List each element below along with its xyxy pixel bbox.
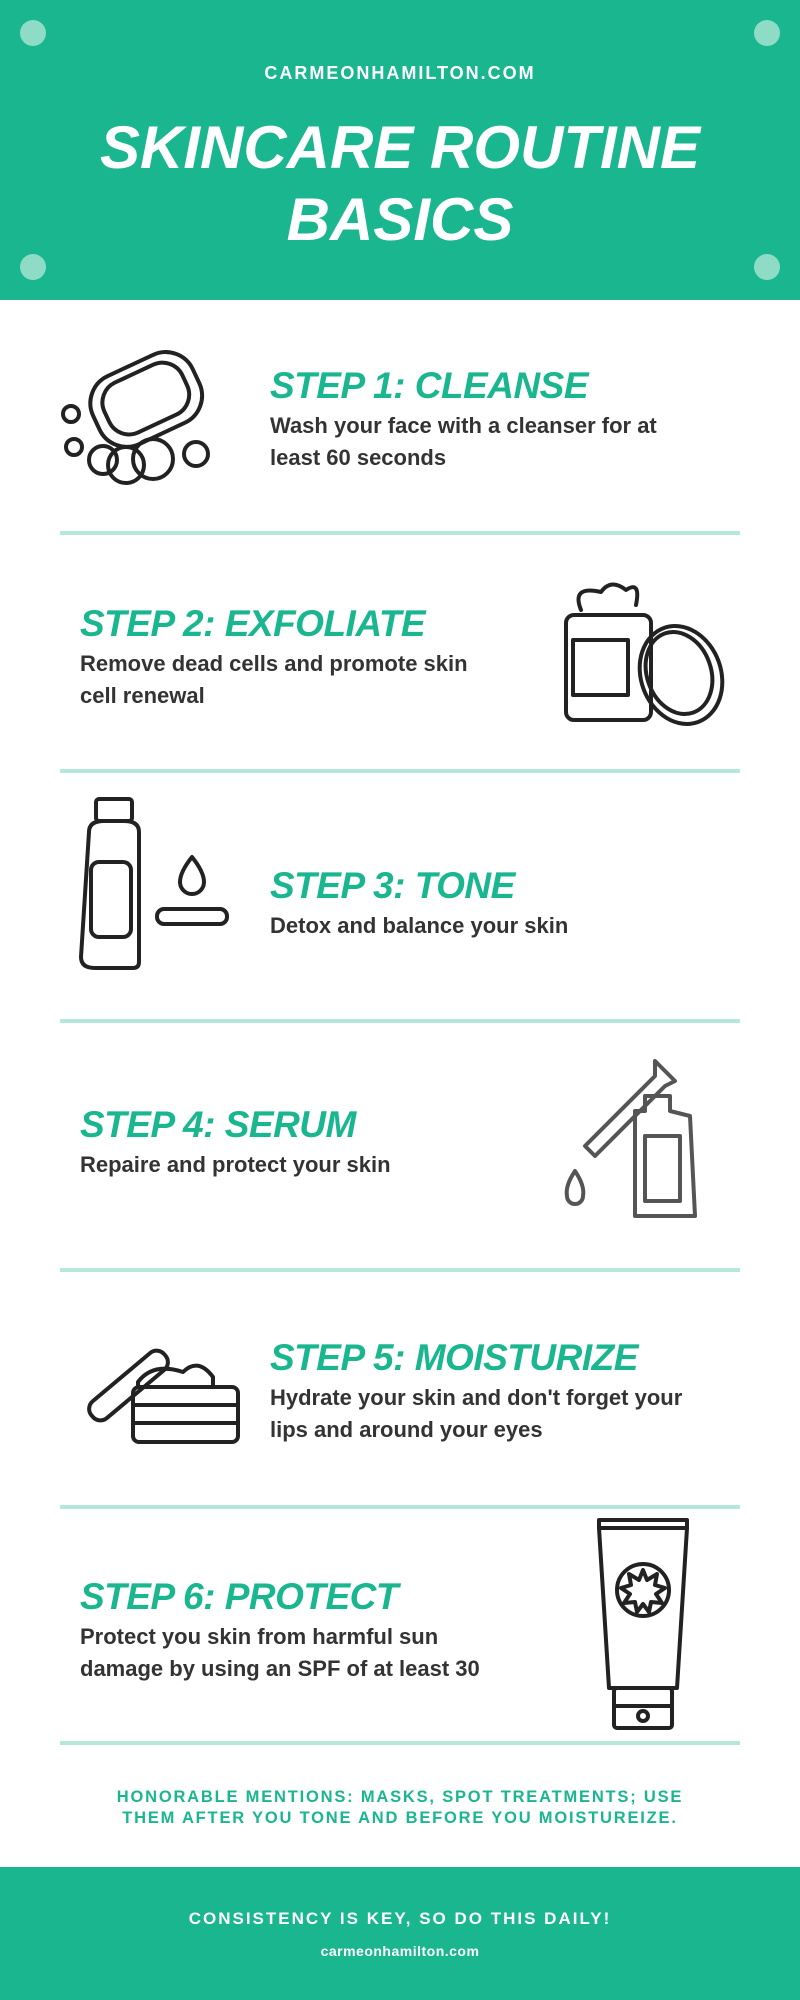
step 2 text (80, 603, 468, 708)
step 2 description: Remove dead cells and promote skin cell renewal (80, 651, 468, 708)
step 2 title: STEP 2: EXFOLIATE (80, 603, 425, 644)
honorable mentions: HONORABLE MENTIONS: MASKS, SPOT TREATMENTS; USE (117, 1788, 683, 1806)
step 1 text (270, 365, 657, 470)
step 4 text (80, 1104, 391, 1177)
step 5 title: STEP 5: MOISTURIZE (270, 1337, 638, 1378)
honorable mentions (117, 1788, 683, 1827)
step 3 title: STEP 3: TONE (270, 865, 515, 906)
step 4 description: Repaire and protect your skin (80, 1152, 391, 1177)
honorable mentions: THEM AFTER YOU TONE AND BEFORE YOU MOISTUREIZE. (122, 1809, 678, 1827)
icon: toner bottle (79, 797, 229, 970)
footer site: carmeonhamilton.com (321, 1943, 479, 1959)
footer (0, 1867, 800, 2000)
title: BASICS (287, 186, 513, 253)
icon: sunscreen tube (597, 1518, 689, 1730)
dot top-left (20, 20, 46, 46)
icon: cream jar (87, 1348, 240, 1444)
header (0, 0, 800, 300)
dot top-right (754, 20, 780, 46)
step 1 description: Wash your face with a cleanser for at least 60 seconds (270, 413, 657, 470)
site name: CARMEONHAMILTON.COM (264, 63, 536, 83)
icon: soap (61, 350, 210, 485)
icon: dropper (564, 1059, 697, 1218)
title (100, 114, 702, 253)
footer message: CONSISTENCY IS KEY, SO DO THIS DAILY! (189, 1909, 611, 1928)
step 6 text (80, 1576, 480, 1681)
step 3 description: Detox and balance your skin (270, 913, 568, 938)
step 5 description: Hydrate your skin and don't forget your lips and around your eyes (270, 1385, 682, 1442)
step 6 title: STEP 6: PROTECT (80, 1576, 398, 1617)
step 6 description: Protect you skin from harmful sun damage by using an SPF of at least 30 (80, 1624, 480, 1681)
step 5 text (270, 1337, 682, 1442)
title: SKINCARE ROUTINE (100, 114, 700, 181)
icon: exfoliant jar (564, 582, 724, 726)
dot bottom-right (754, 254, 780, 280)
dot bottom-left (20, 254, 46, 280)
step 4 title: STEP 4: SERUM (80, 1104, 356, 1145)
step 3 text (270, 865, 568, 938)
step 1 title: STEP 1: CLEANSE (270, 365, 588, 406)
